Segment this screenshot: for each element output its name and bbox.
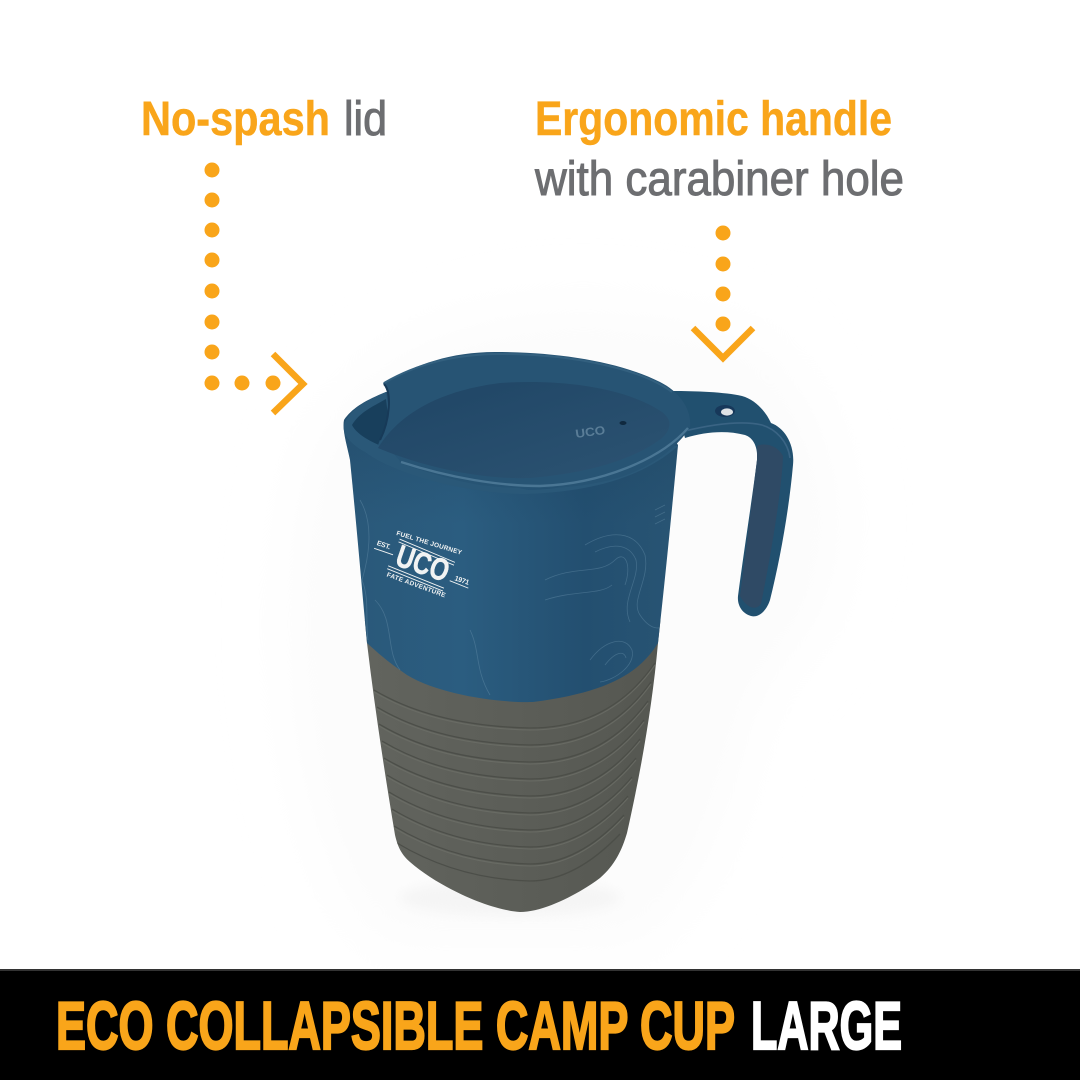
lid outer ring bbox=[378, 352, 690, 488]
callout: no-splash lid label: lid bbox=[344, 93, 387, 146]
cup handle bbox=[672, 391, 793, 616]
callout: ergonomic handle label: with carabiner hole bbox=[534, 153, 904, 206]
rib highlights bbox=[374, 665, 655, 866]
product photo: cup illustration bbox=[340, 352, 793, 920]
UCO logo on cup: 1971 bbox=[453, 575, 470, 587]
lid bbox=[378, 352, 690, 488]
callout: ergonomic handle label: Ergonomic handle bbox=[535, 93, 892, 146]
UCO logo on cup: EST. bbox=[376, 540, 391, 551]
UCO logo on cup bbox=[366, 523, 479, 606]
blue upper body bbox=[340, 380, 690, 702]
title banner bbox=[0, 969, 1080, 1080]
callout: no-splash lid label: No-spash bbox=[141, 93, 330, 146]
handle grip face bbox=[740, 444, 783, 608]
UCO logo on cup: FATE ADVENTURE bbox=[386, 572, 447, 600]
lid UCO mark: UCO bbox=[574, 423, 606, 441]
arrow: dotted line to lid bbox=[204, 162, 303, 413]
topographic contour lines bbox=[360, 500, 665, 695]
base ribs bbox=[374, 663, 655, 881]
banner background bbox=[0, 970, 1080, 1080]
lid sip hole bbox=[620, 421, 626, 425]
carabiner hole bbox=[715, 405, 735, 417]
UCO logo on cup: FUEL THE JOURNEY bbox=[395, 530, 463, 557]
gray ribbed base bbox=[364, 620, 660, 912]
background glow behind cup bbox=[287, 309, 842, 950]
lid rim highlight bbox=[401, 428, 688, 486]
UCO logo on cup: UCO bbox=[392, 538, 454, 589]
lid spout edge bbox=[380, 384, 389, 440]
cup ground shadow bbox=[400, 880, 620, 916]
upper body top shading bbox=[344, 392, 678, 474]
size label: LARGE bbox=[751, 988, 902, 1064]
cup rim bbox=[344, 392, 678, 494]
cup opening shadow bbox=[352, 399, 392, 450]
cup body bbox=[340, 380, 690, 920]
product title: ECO COLLAPSIBLE CAMP CUP bbox=[56, 988, 735, 1064]
callout: ergonomic handle label bbox=[534, 93, 904, 206]
lid upper ring highlight bbox=[384, 354, 672, 392]
lid recessed panel bbox=[378, 382, 670, 478]
banner top line bbox=[0, 969, 1080, 971]
arrow: dotted line to handle bbox=[693, 226, 753, 358]
